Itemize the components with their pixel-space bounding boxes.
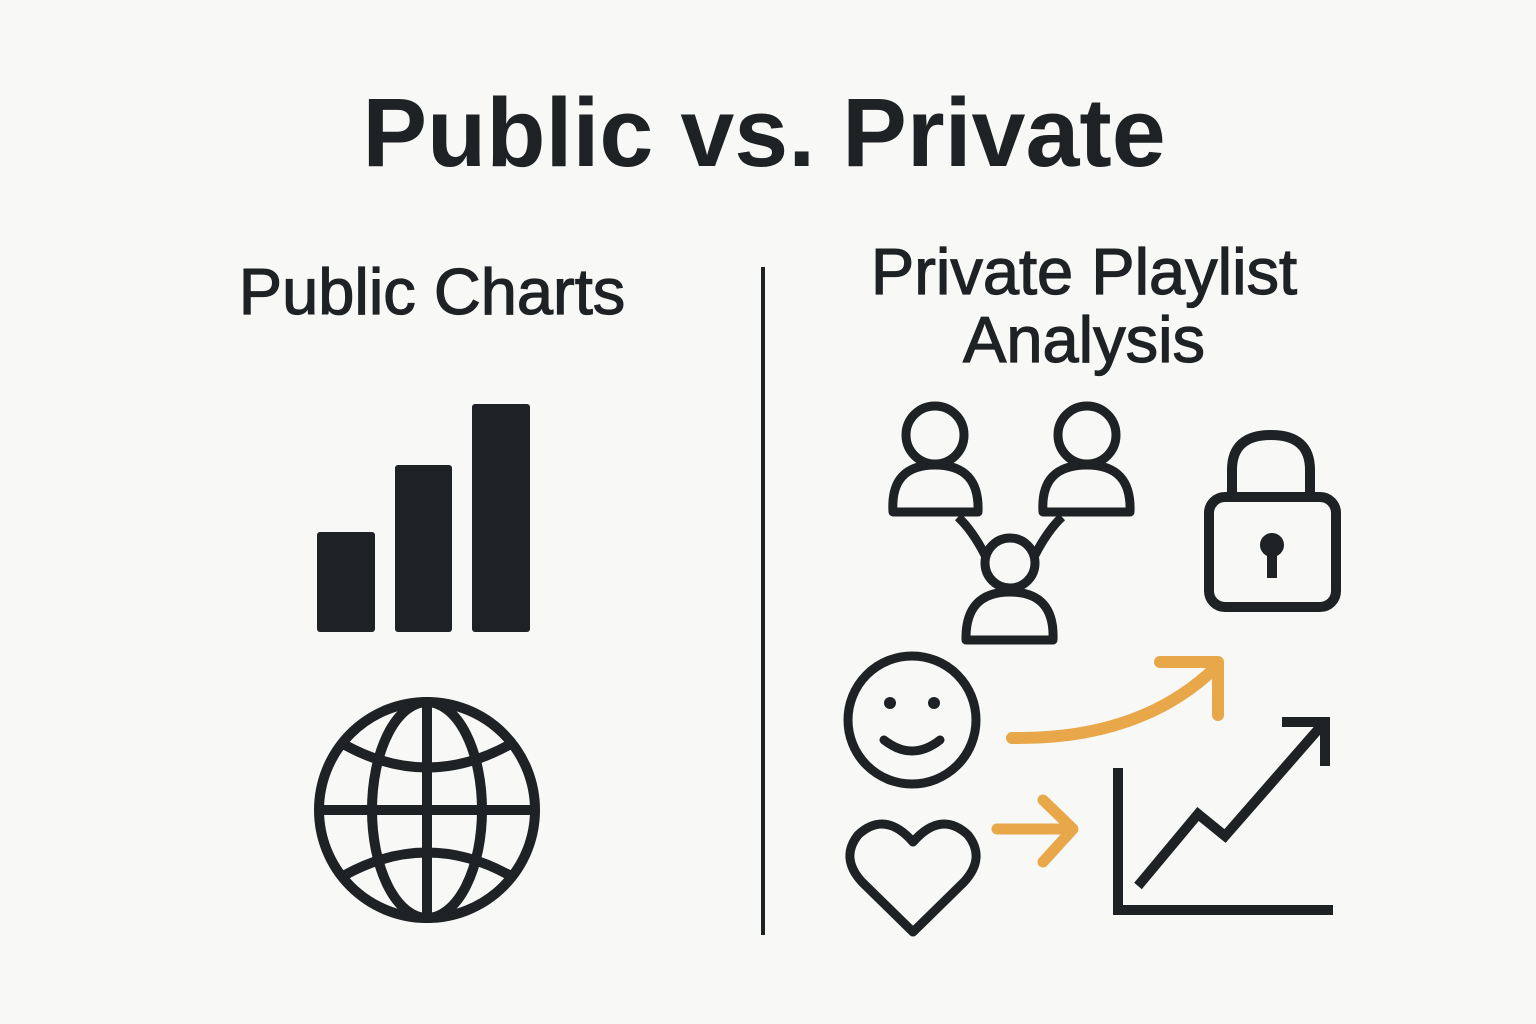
arrow: curved orange (1012, 662, 1218, 738)
icon: bar chart (317, 404, 530, 632)
divider (761, 267, 765, 935)
title: Public vs. Private (362, 78, 1166, 187)
heading: public charts: Public Charts (239, 255, 625, 328)
heading: private playlist analysis: Private Playlist (871, 235, 1297, 308)
icon: heart (850, 824, 976, 932)
icon: line chart (1118, 722, 1333, 910)
arrow: small orange (997, 800, 1073, 862)
icon: people network (893, 406, 1130, 640)
icon: globe (319, 702, 535, 918)
heading: private playlist analysis (871, 235, 1298, 376)
icon: lock (1209, 435, 1336, 607)
icon: smiley (848, 656, 976, 784)
heading: private playlist analysis: Analysis (963, 303, 1205, 376)
